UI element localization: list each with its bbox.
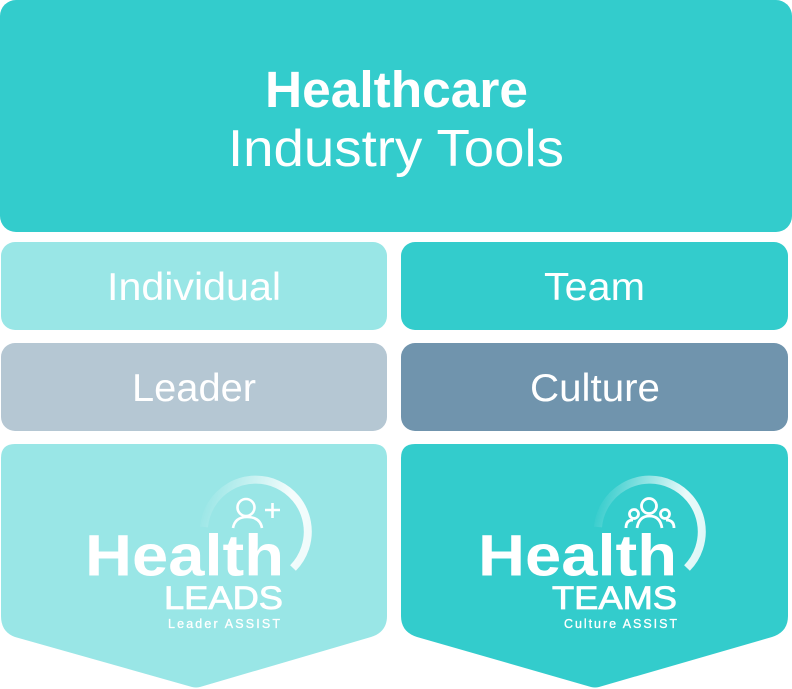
logo wordmark <box>85 524 284 631</box>
panel: Team: Team <box>544 266 645 309</box>
logo wordmark <box>478 524 677 631</box>
logo wordmark: Culture ASSIST <box>564 617 677 631</box>
panel: title banner <box>0 0 792 232</box>
logo wordmark: LEADS <box>164 580 283 616</box>
panel: Health Teams chevron <box>401 444 788 688</box>
title <box>228 61 564 178</box>
panel: Individual <box>1 242 387 330</box>
panel: Individual: Individual <box>107 266 281 309</box>
icon: arc <box>598 480 702 568</box>
title: Industry Tools <box>228 120 564 178</box>
logo wordmark: Health <box>85 524 284 588</box>
icon: team of three people <box>626 498 674 528</box>
logo: Health Teams <box>478 480 702 631</box>
panel: Team <box>401 242 788 330</box>
panel: Leader: Leader <box>132 367 256 410</box>
panel: Leader <box>1 343 387 431</box>
logo wordmark: Leader ASSIST <box>168 617 280 631</box>
panel: Culture: Culture <box>530 367 660 410</box>
icon: arc <box>204 480 308 568</box>
logo wordmark: TEAMS <box>552 580 677 616</box>
logo: Health Leads <box>85 480 308 631</box>
icon: person with plus <box>233 499 280 528</box>
title: Healthcare <box>265 61 528 118</box>
panel: Culture <box>401 343 788 431</box>
logo wordmark: Health <box>478 524 677 588</box>
panel: Health Leads chevron <box>1 444 387 688</box>
